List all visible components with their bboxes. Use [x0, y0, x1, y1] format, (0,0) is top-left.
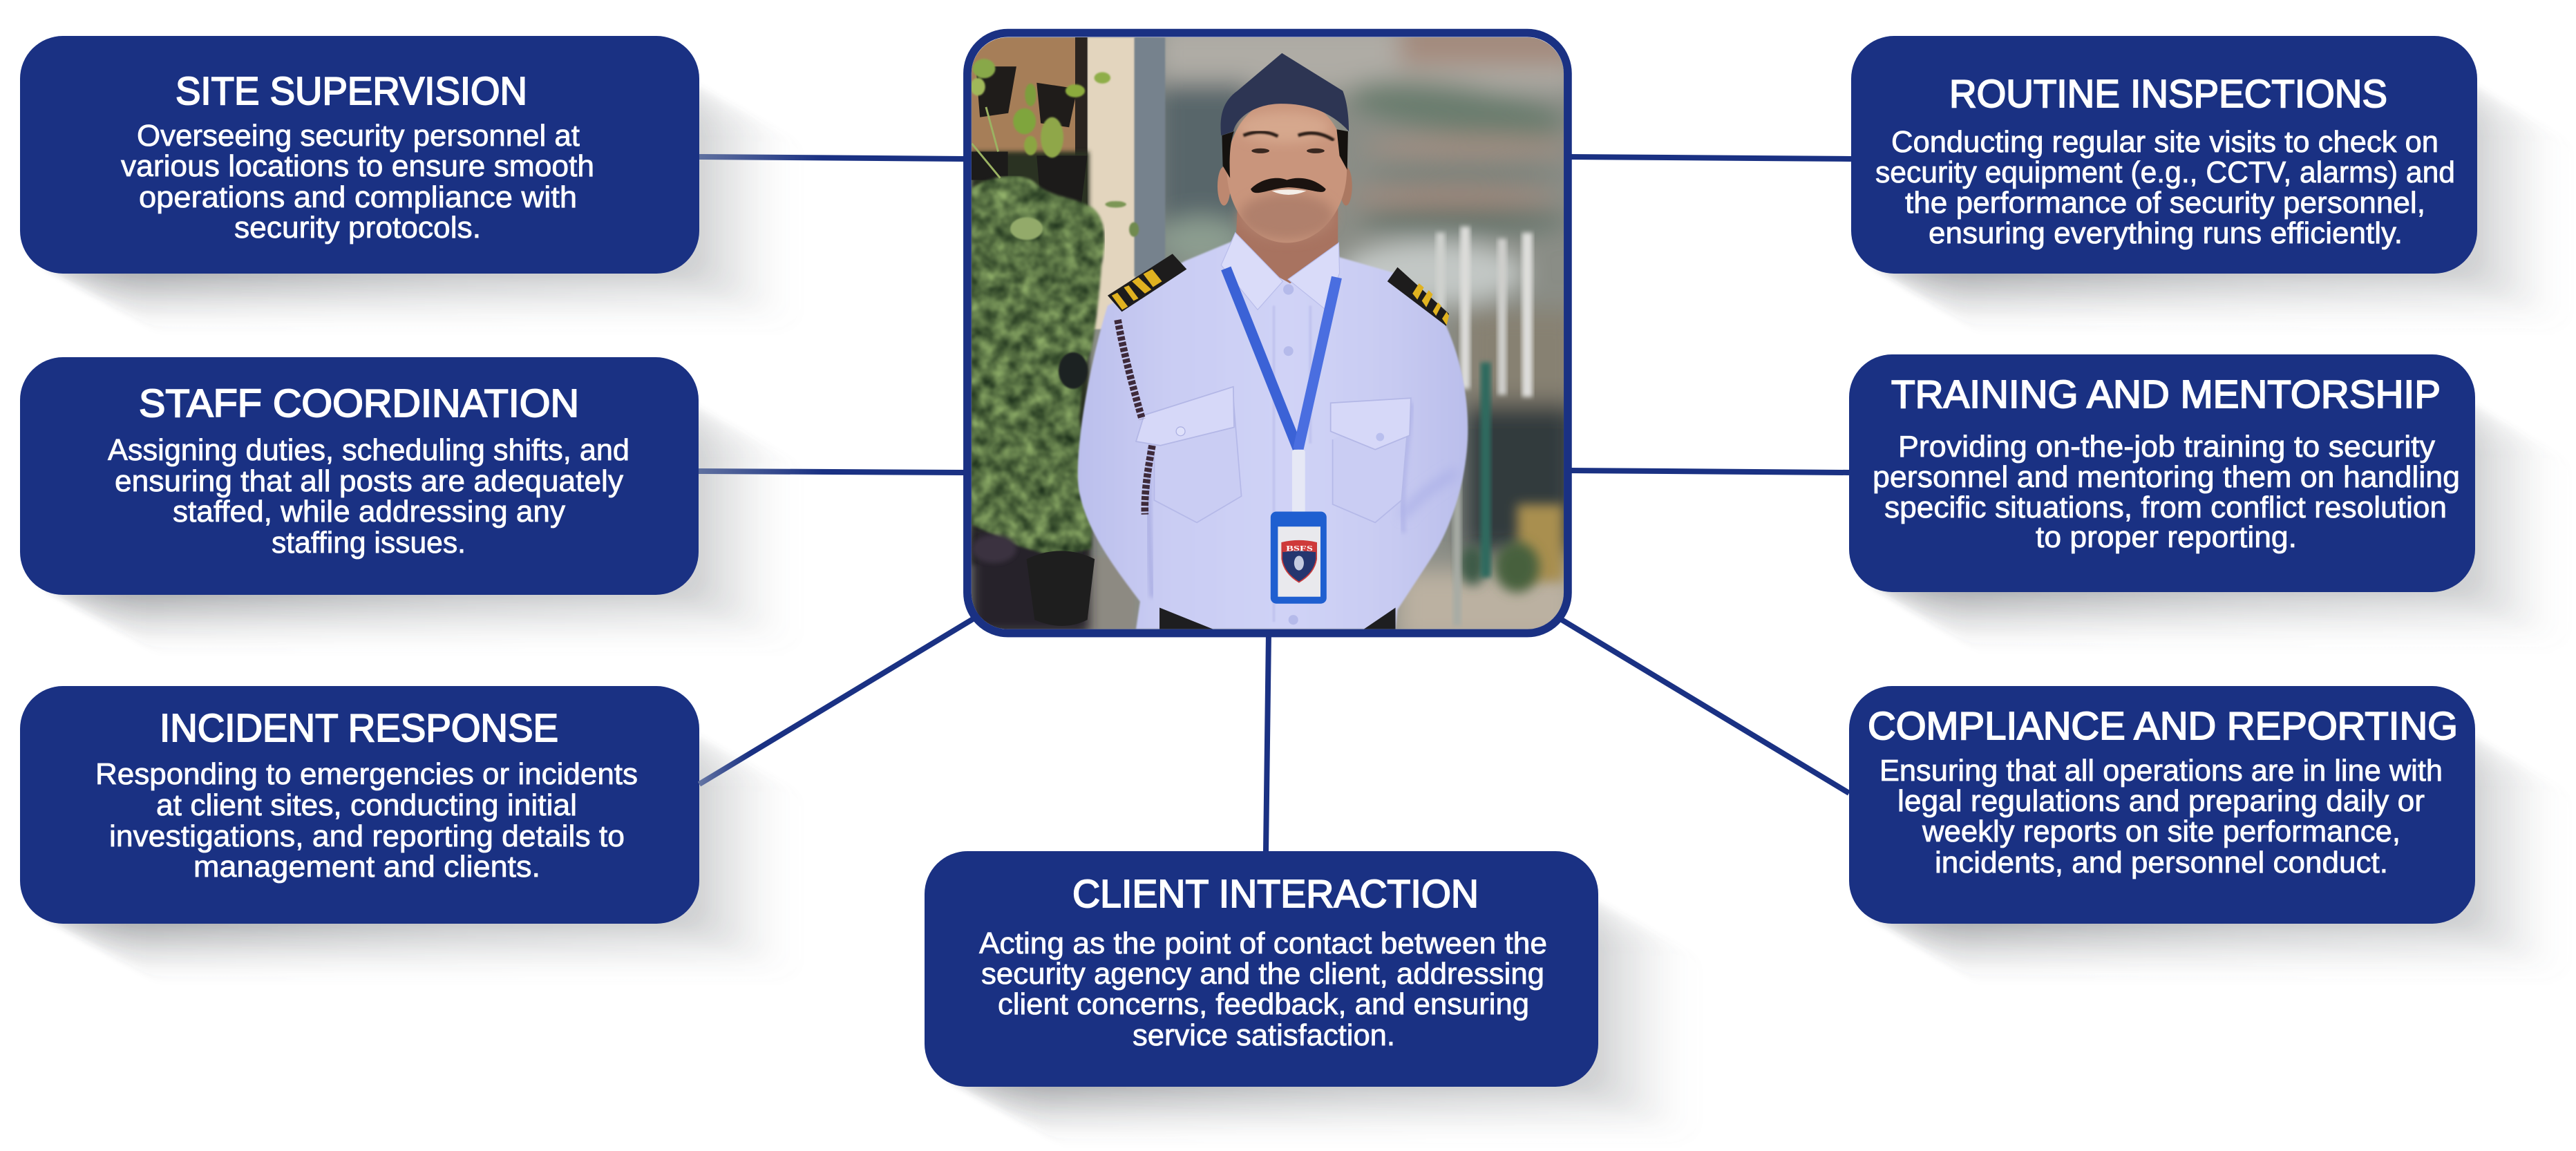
photo background	[972, 22, 1582, 646]
card shadow	[1864, 727, 2576, 984]
panel: compliance and reporting	[1849, 686, 2576, 984]
description: training and mentorship: to proper reporting.	[2036, 520, 2297, 554]
description: compliance and reporting: legal regulations and preparing daily or	[1897, 784, 2425, 818]
description: routine inspections: security equipment (e.g., CCTV, alarms) and	[1875, 155, 2455, 189]
card background	[1849, 686, 2475, 924]
card shadow	[1864, 395, 2576, 653]
description: training and mentorship: specific situations, from conflict resolution	[1884, 491, 2447, 524]
id card	[1271, 450, 1327, 604]
connector: incident response to photo	[699, 615, 980, 784]
card background	[925, 851, 1598, 1087]
guard: shirt pockets and buttons	[1136, 284, 1411, 625]
connector: site supervision to photo	[699, 157, 965, 159]
heading: staff coordination: STAFF COORDINATION	[139, 381, 579, 426]
connector: compliance and reporting to photo	[1558, 618, 1849, 793]
description: compliance and reporting	[1879, 754, 2443, 879]
description: routine inspections: ensuring everything runs efficiently.	[1929, 216, 2403, 250]
description: compliance and reporting: incidents, and personnel conduct.	[1935, 846, 2388, 879]
description: client interaction: Acting as the point of contact between the	[979, 926, 1547, 960]
description: routine inspections: Conducting regular site visits to check on	[1891, 125, 2438, 159]
description: routine inspections	[1875, 125, 2455, 250]
photo frame	[967, 33, 1568, 634]
card background	[20, 36, 699, 274]
description: staff coordination: Assigning duties, scheduling shifts, and	[108, 433, 629, 467]
heading: routine inspections: ROUTINE INSPECTIONS	[1949, 72, 2387, 116]
description: compliance and reporting: Ensuring that all operations are in line with	[1879, 754, 2443, 788]
panel: staff coordination	[20, 357, 808, 656]
connector: training and mentorship to photo	[1571, 470, 1849, 473]
panel: incident response	[20, 686, 808, 984]
panel: client interaction	[925, 851, 1707, 1147]
card background	[1851, 36, 2477, 274]
panel: routine inspections	[1851, 36, 2576, 334]
description: staff coordination: staffing issues.	[272, 526, 466, 560]
photo: smiling security guard in uniform	[967, 22, 1582, 646]
description: training and mentorship: Providing on-the-job training to security	[1898, 430, 2435, 464]
description: training and mentorship: personnel and mentoring them on handling	[1873, 460, 2460, 494]
description: client interaction: security agency and the client, addressing	[981, 957, 1544, 991]
guard: epaulettes	[1108, 254, 1449, 326]
connector: client interaction to photo	[1266, 632, 1269, 851]
heading: training and mentorship: TRAINING AND MENTORSHIP	[1891, 372, 2441, 417]
card shadow	[37, 77, 808, 334]
id card: BSFS	[1286, 544, 1314, 553]
description: incident response	[95, 757, 638, 884]
heading: site supervision: SITE SUPERVISION	[176, 69, 527, 113]
description: client interaction: service satisfaction.	[1133, 1018, 1395, 1052]
card background	[20, 357, 699, 595]
description: training and mentorship	[1873, 430, 2460, 554]
card shadow	[941, 891, 1707, 1147]
guard: blue lanyard	[1226, 268, 1336, 450]
heading: incident response: INCIDENT RESPONSE	[160, 706, 558, 750]
description: incident response: at client sites, conducting initial	[156, 788, 577, 822]
connector: staff coordination to photo	[699, 471, 965, 473]
description: staff coordination: ensuring that all posts are adequately	[115, 464, 623, 498]
description: site supervision: operations and compliance with	[139, 180, 577, 214]
description: staff coordination	[108, 433, 629, 560]
description: incident response: Responding to emergencies or incidents	[95, 757, 638, 791]
description: client interaction: client concerns, feedback, and ensuring	[998, 987, 1529, 1021]
card shadow	[1866, 77, 2576, 334]
description: incident response: management and clients.	[193, 850, 540, 884]
card shadow	[37, 398, 808, 656]
heading: compliance and reporting: COMPLIANCE AND REPORTING	[1868, 704, 2458, 748]
guard: belt	[1159, 608, 1396, 629]
photo: green plants and pots	[971, 59, 1139, 634]
description: site supervision: various locations to ensure smooth	[121, 149, 594, 183]
card shadow	[37, 727, 808, 984]
guard: shirt and arms	[1078, 241, 1468, 629]
description: staff coordination: staffed, while addressing any	[173, 495, 565, 529]
description: site supervision: Overseeing security personnel at	[137, 119, 580, 153]
connector: routine inspections to photo	[1571, 157, 1851, 159]
description: site supervision	[121, 119, 594, 245]
panel: site supervision	[20, 36, 808, 334]
description: routine inspections: the performance of security personnel,	[1905, 186, 2425, 220]
guard: shoulder rope	[1118, 320, 1152, 515]
heading: client interaction: CLIENT INTERACTION	[1072, 872, 1479, 916]
card background	[1849, 354, 2475, 592]
guard: head and cap	[1218, 53, 1352, 243]
description: compliance and reporting: weekly reports on site performance,	[1922, 815, 2400, 848]
card background	[20, 686, 699, 924]
panel: training and mentorship	[1849, 354, 2576, 653]
guard: neck and collar	[1221, 209, 1340, 310]
description: site supervision: security protocols.	[234, 211, 481, 245]
description: client interaction	[979, 926, 1547, 1052]
description: incident response: investigations, and reporting details to	[109, 819, 625, 853]
